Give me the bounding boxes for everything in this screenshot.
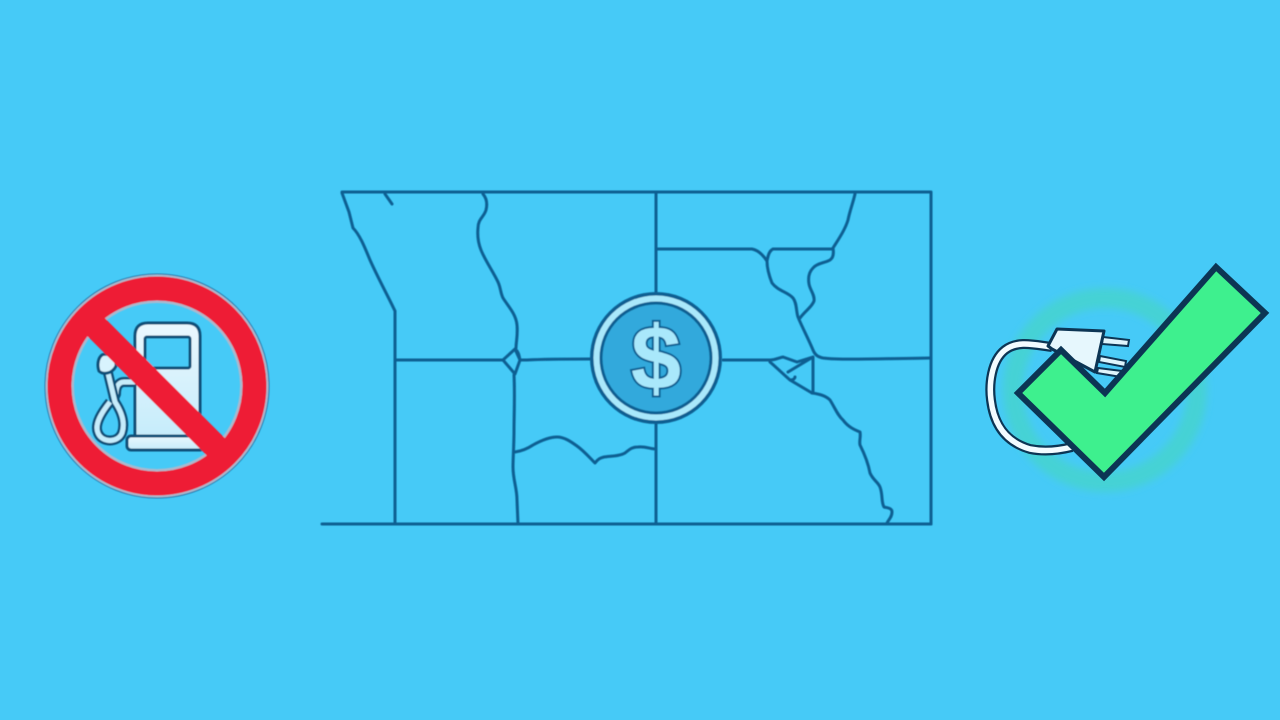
- icon: plug with green check: [990, 267, 1265, 482]
- plug cord: [990, 344, 1072, 450]
- dollar coin: [590, 292, 722, 424]
- icon: no gas pump: [45, 274, 269, 498]
- plug head: [1048, 329, 1104, 372]
- halo: [1013, 298, 1197, 482]
- gas pump: [97, 323, 204, 450]
- map outline: [322, 192, 931, 524]
- prohibition slash: [93, 324, 219, 450]
- plug prongs: [1097, 337, 1129, 377]
- prohibition ring: [60, 288, 254, 484]
- dollar sign: $: [631, 309, 681, 409]
- check mark: [1018, 267, 1265, 477]
